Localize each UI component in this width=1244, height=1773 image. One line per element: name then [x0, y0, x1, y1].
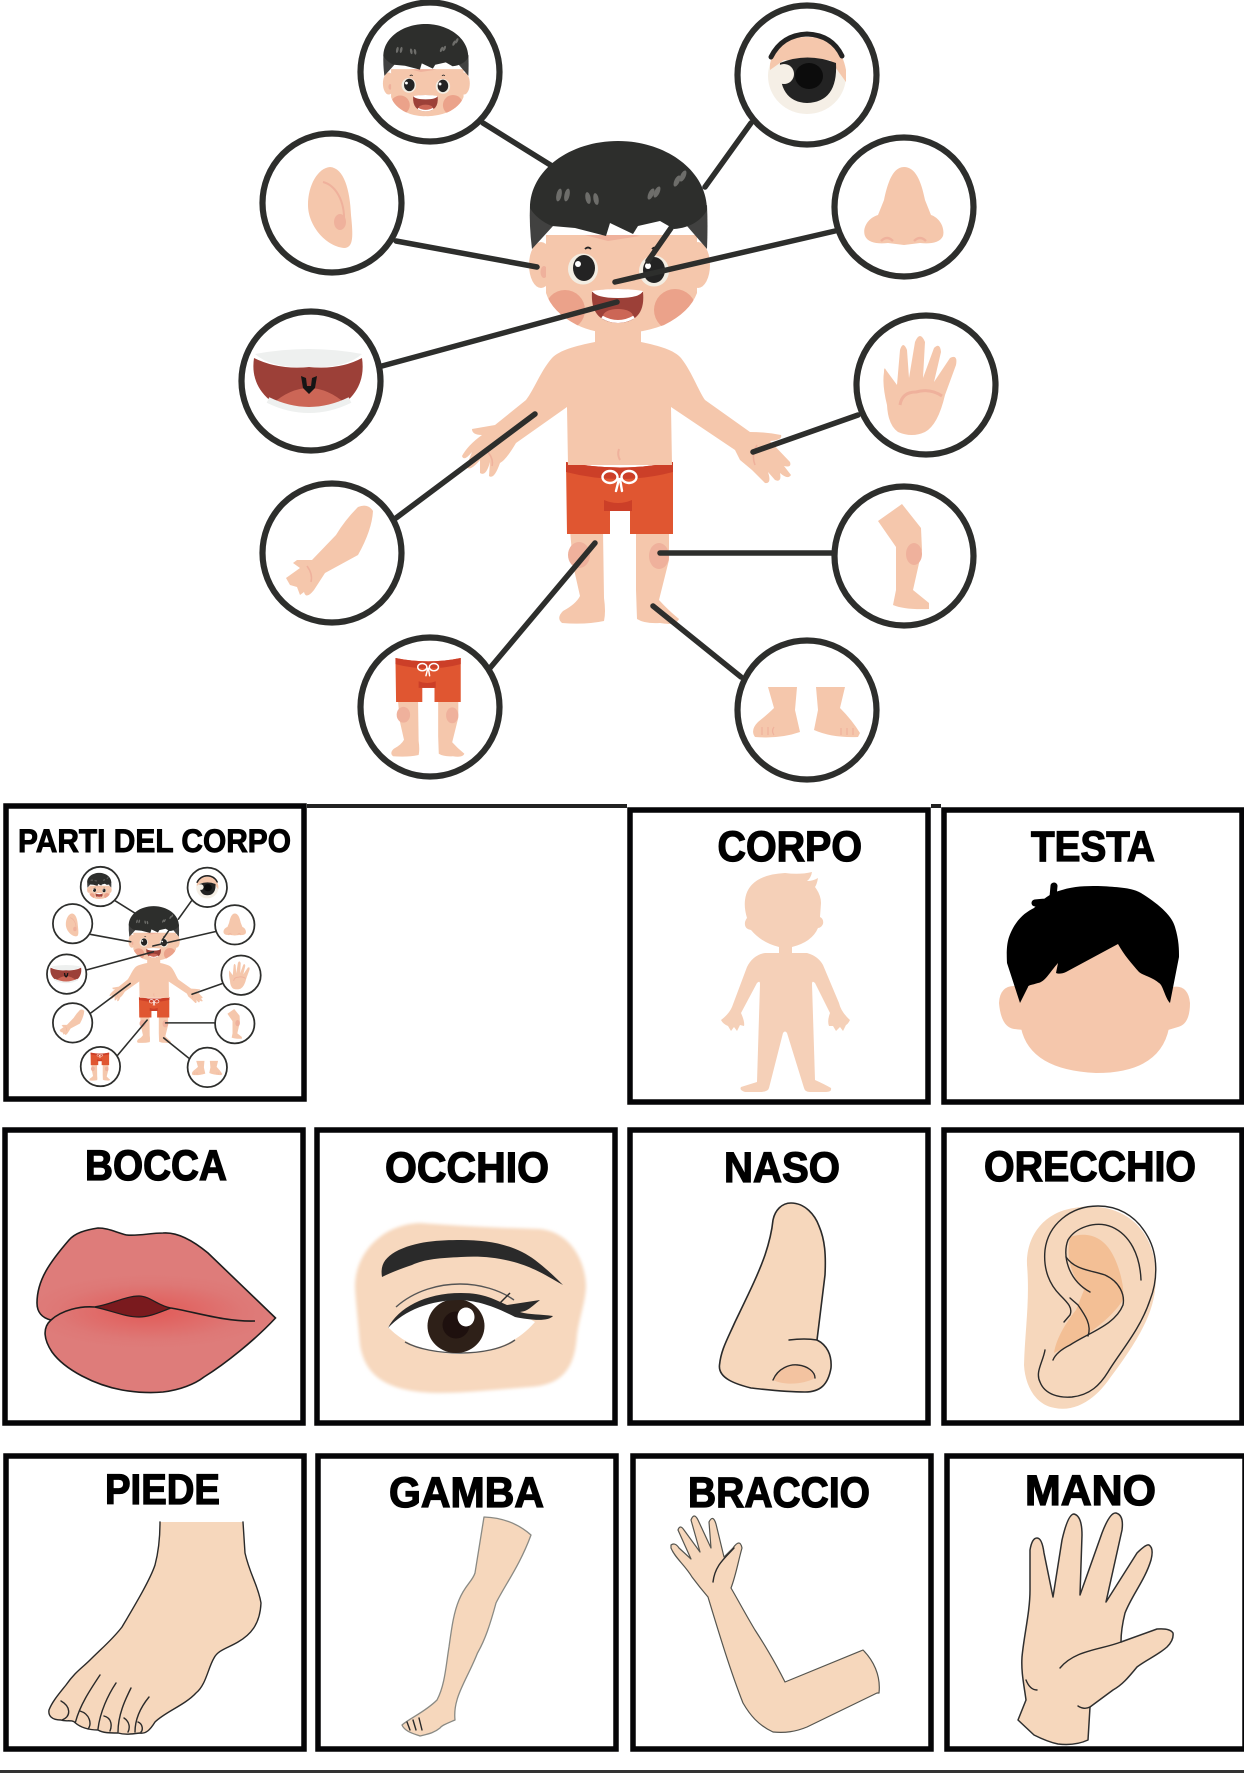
circle: feet [738, 640, 876, 780]
bottom edge bar [0, 1770, 1244, 1773]
circle: arm [262, 484, 402, 622]
icon: head with hair [999, 886, 1190, 1073]
panel: corpo [630, 810, 928, 1102]
panel: braccio [633, 1456, 931, 1749]
label: mano: MANO [1025, 1467, 1156, 1515]
heading: parti del corpo: PARTI DEL CORPO [18, 823, 291, 859]
label: bocca: BOCCA [85, 1142, 227, 1190]
icon: ear [1024, 1206, 1156, 1409]
boy head [529, 141, 710, 333]
icon: hand [1018, 1513, 1173, 1744]
label: corpo: CORPO [718, 823, 862, 871]
icon: foot [49, 1522, 261, 1734]
connector lines [382, 123, 858, 677]
panel: piede [6, 1456, 304, 1749]
label: braccio: BRACCIO [688, 1469, 870, 1517]
panel: testa [944, 810, 1242, 1102]
circle: eye [738, 6, 876, 144]
panel: bocca [5, 1130, 303, 1423]
empty card top edge [307, 804, 941, 808]
circle: head [360, 2, 500, 142]
icon: body silhouette [721, 872, 850, 1092]
circle: lower body [360, 638, 500, 776]
icon: eye [355, 1223, 586, 1393]
label: naso: NASO [724, 1144, 840, 1192]
panel: parti del corpo [6, 806, 304, 1099]
body parts diagram [242, 2, 996, 780]
panel: occhio [317, 1130, 615, 1423]
label: occhio: OCCHIO [385, 1144, 549, 1192]
icon: leg [402, 1517, 531, 1736]
boy torso and arms [462, 325, 791, 483]
icon: lips [37, 1228, 276, 1393]
circle: nose [834, 138, 974, 276]
label: piede: PIEDE [105, 1466, 220, 1514]
panel: gamba [318, 1456, 616, 1749]
boy figure [462, 141, 791, 624]
label: testa: TESTA [1031, 823, 1155, 871]
panel: naso [630, 1130, 928, 1423]
boy lower body: shorts and legs [559, 462, 679, 624]
circle: ear [262, 134, 402, 272]
icon: nose [719, 1203, 831, 1392]
circle: hand [856, 316, 996, 454]
panel: orecchio [944, 1130, 1242, 1423]
label: orecchio: ORECCHIO [984, 1143, 1196, 1191]
circle: leg [834, 486, 974, 626]
label: gamba: GAMBA [389, 1469, 544, 1517]
circle: open mouth [242, 312, 380, 450]
thumbnail diagram [47, 867, 261, 1087]
icon: arm [671, 1516, 879, 1732]
panel: mano [947, 1456, 1244, 1749]
